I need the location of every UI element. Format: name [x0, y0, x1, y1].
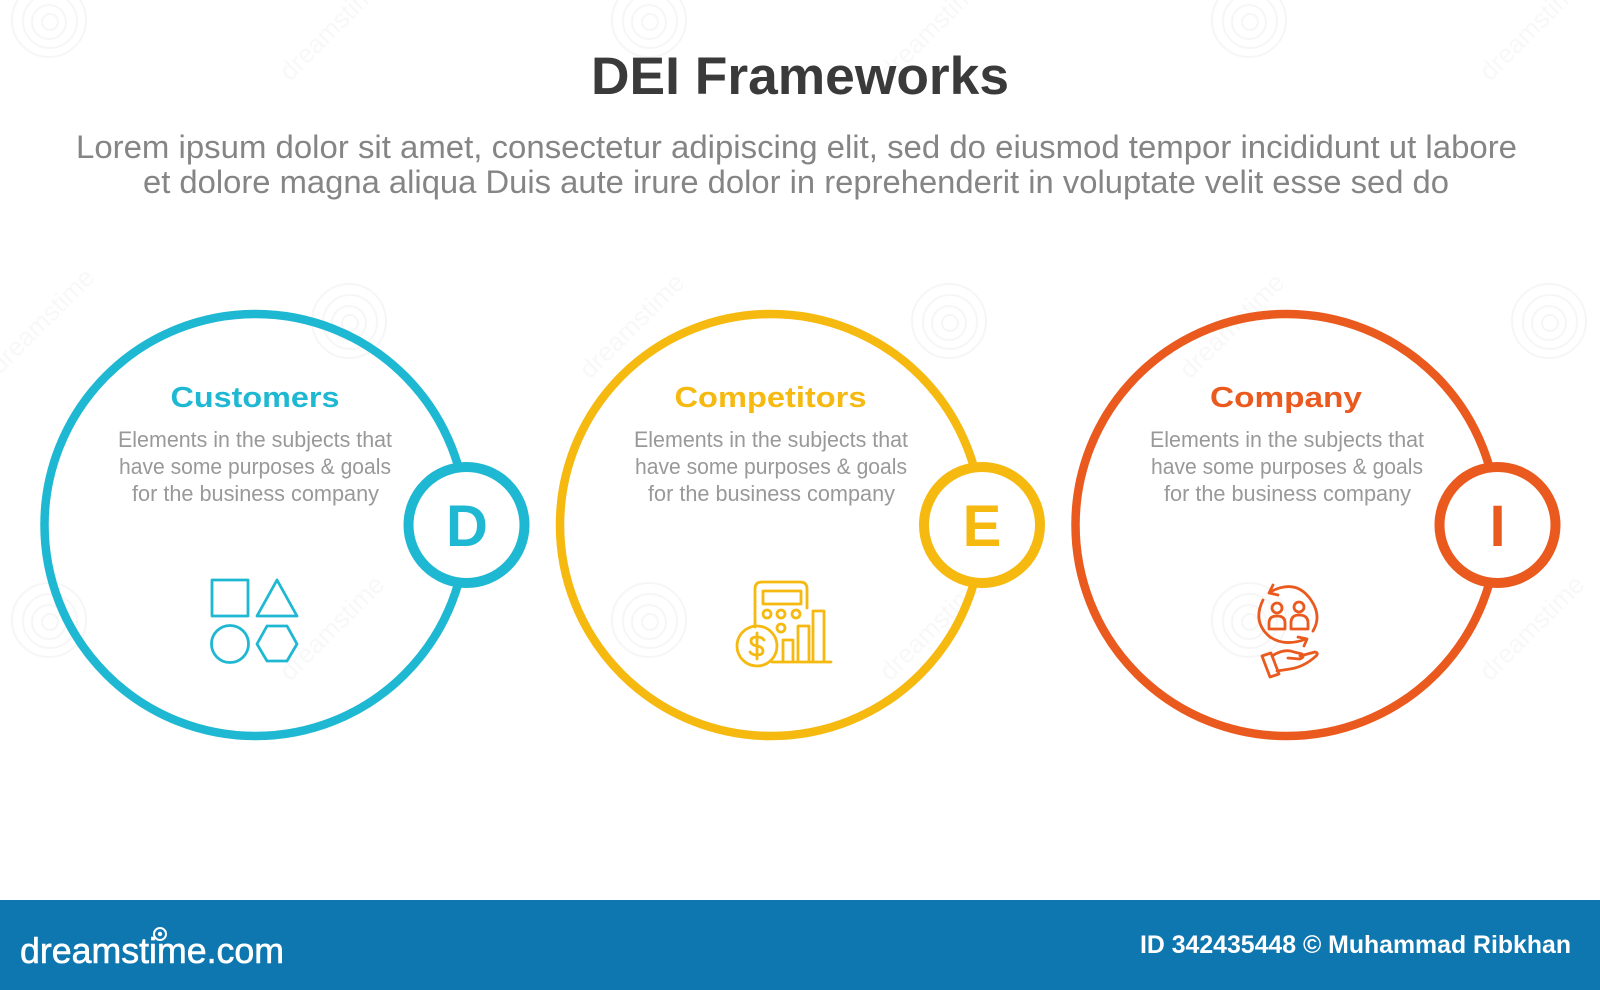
body text: Company: Elements in the subjects that — [1150, 427, 1424, 452]
badge E: E — [963, 494, 1001, 559]
footer logo text: dreamstime.com — [20, 930, 284, 971]
badge D: D — [446, 494, 488, 559]
body text: Customers: have some purposes & goals — [119, 454, 391, 479]
body text: Customers — [118, 427, 392, 506]
text: dreamstime — [1473, 569, 1590, 686]
text: dreamstime — [873, 569, 990, 686]
body text: Competitors: Elements in the subjects that — [634, 427, 908, 452]
icon: calculator and finance — [737, 582, 831, 666]
badge I: I — [1489, 494, 1506, 559]
panel: E competitors — [560, 314, 1040, 736]
text: dreamstime — [273, 569, 390, 686]
subtitle text: et dolore magna aliqua Duis aute irure dolor in reprehenderit in voluptate velit esse sed do — [143, 164, 1449, 200]
body text: Company — [1150, 427, 1424, 506]
large ring D — [44, 314, 466, 736]
panel: D customers — [44, 314, 524, 736]
large ring I — [1076, 314, 1498, 736]
badge D — [408, 467, 524, 583]
body text: Competitors: for the business company — [648, 481, 895, 506]
body text: Competitors — [634, 427, 908, 506]
subtitle text: Lorem ipsum dolor sit amet, consectetur adipiscing elit, sed do eiusmod tempor incididunt ut labore — [76, 129, 1517, 165]
text: dreamstime — [1173, 267, 1290, 384]
panel: I company — [1076, 314, 1556, 736]
title: DEI Frameworks — [591, 47, 1009, 106]
subtitle text — [76, 129, 1517, 200]
body text: Customers: for the business company — [132, 481, 379, 506]
body text: Company: for the business company — [1164, 481, 1411, 506]
heading: Competitors: Competitors — [674, 382, 866, 414]
body text: Customers: Elements in the subjects that — [118, 427, 392, 452]
heading: Company: Company — [1210, 382, 1362, 414]
footer credit text: ID 342435448 © Muhammad Ribkhan — [1140, 931, 1571, 959]
body text: Company: have some purposes & goals — [1151, 454, 1423, 479]
icon: people cycle in hand — [1259, 585, 1317, 677]
badge E — [924, 467, 1040, 583]
text: dreamstime — [573, 267, 690, 384]
heading: Customers: Customers — [170, 382, 340, 414]
large ring E — [560, 314, 982, 736]
icon: shapes — [212, 580, 297, 662]
footer bar — [0, 900, 1600, 990]
body text: Competitors: have some purposes & goals — [635, 454, 907, 479]
badge I — [1440, 467, 1556, 583]
